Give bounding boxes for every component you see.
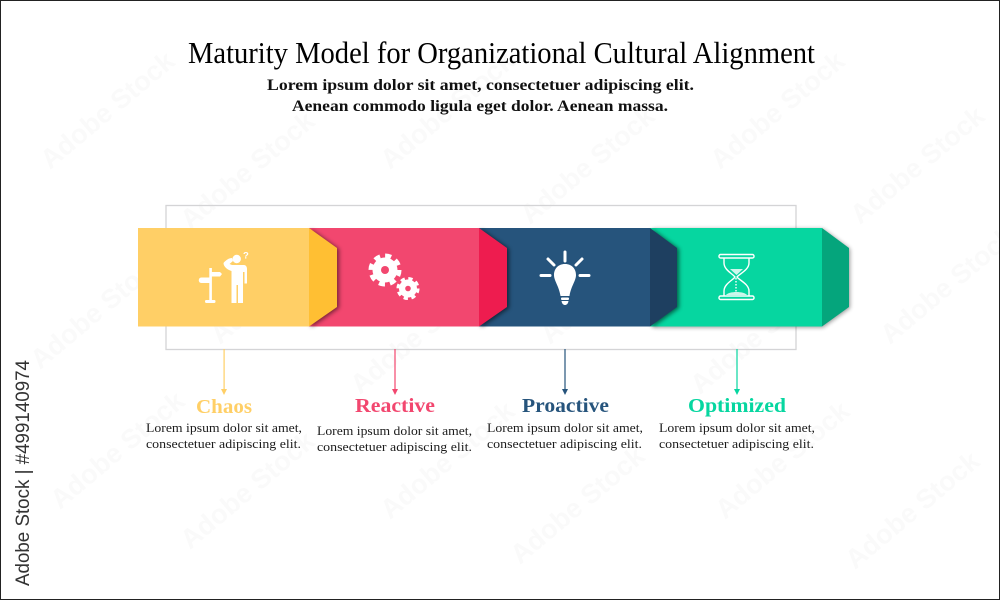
process arrow band bbox=[138, 228, 850, 328]
watermark pattern: Adobe Stock bbox=[535, 220, 681, 350]
text block: Chaos bbox=[146, 396, 302, 451]
watermark pattern: Adobe Stock bbox=[375, 45, 521, 175]
text block: Proactive: Proactive bbox=[522, 395, 609, 417]
watermark pattern: Adobe Stock bbox=[45, 385, 191, 515]
text block: Reactive: Lorem ipsum dolor sit amet, bbox=[317, 424, 472, 438]
watermark pattern: Adobe Stock bbox=[685, 270, 831, 400]
step 4 block: Optimized bbox=[650, 228, 850, 328]
arrow: Chaos bbox=[221, 349, 227, 395]
icon: person at signpost bbox=[199, 250, 249, 303]
stock credit text: Adobe Stock | #499140974 bbox=[13, 360, 34, 586]
watermark pattern: Adobe Stock bbox=[710, 395, 856, 525]
watermark pattern: Adobe Stock bbox=[845, 100, 991, 230]
icon: hourglass bbox=[719, 254, 754, 300]
text block: Optimized bbox=[659, 395, 815, 451]
watermark pattern: Adobe Stock bbox=[505, 440, 651, 570]
subtitle: Lorem ipsum dolor sit amet, consectetuer adipiscing elit. bbox=[267, 77, 694, 94]
watermark pattern: Adobe Stock bbox=[25, 245, 171, 375]
watermark pattern: Adobe Stock bbox=[375, 395, 521, 525]
watermark pattern: Adobe Stock bbox=[840, 445, 986, 575]
text block: Reactive: consectetuer adipiscing elit. bbox=[317, 440, 472, 454]
watermark pattern: Adobe Stock bbox=[205, 220, 351, 350]
outline frame bbox=[166, 206, 796, 350]
text block: Chaos: Chaos bbox=[196, 396, 252, 418]
subtitle: Aenean commodo ligula eget dolor. Aenean massa. bbox=[292, 98, 668, 115]
icon: person at signpost: ? bbox=[243, 250, 249, 262]
watermark pattern: Adobe Stock bbox=[175, 105, 321, 235]
step 1 block: Chaos bbox=[138, 228, 339, 328]
step 2 block: Reactive bbox=[309, 228, 509, 328]
watermark pattern: Adobe Stock bbox=[515, 100, 661, 230]
watermark pattern: Adobe Stock bbox=[345, 270, 491, 400]
step 3 block: Proactive bbox=[479, 228, 679, 328]
text block: Chaos: Lorem ipsum dolor sit amet, bbox=[146, 421, 302, 435]
text block: Proactive: Lorem ipsum dolor sit amet, bbox=[487, 421, 643, 435]
icon: gears bbox=[371, 256, 418, 298]
text block: Reactive bbox=[317, 395, 472, 454]
title: Maturity Model for Organizational Cultural Alignment bbox=[188, 35, 815, 70]
arrow: Reactive bbox=[392, 349, 398, 395]
watermark pattern: Adobe Stock bbox=[705, 45, 851, 175]
text block: Optimized: Optimized bbox=[688, 395, 786, 417]
watermark pattern: Adobe Stock bbox=[175, 425, 321, 555]
text block: Chaos: consectetuer adipiscing elit. bbox=[146, 437, 301, 451]
text block: Optimized: Lorem ipsum dolor sit amet, bbox=[659, 421, 815, 435]
text block: Proactive bbox=[487, 395, 643, 451]
subtitle bbox=[267, 77, 694, 115]
text block: Proactive: consectetuer adipiscing elit. bbox=[487, 437, 642, 451]
icon: light bulb bbox=[541, 252, 589, 305]
arrow: Optimized bbox=[734, 349, 740, 395]
watermark pattern: Adobe Stock bbox=[35, 45, 181, 175]
text block: Optimized: consectetuer adipiscing elit. bbox=[659, 437, 814, 451]
text block: Reactive: Reactive bbox=[355, 395, 435, 417]
arrow: Proactive bbox=[562, 349, 568, 395]
